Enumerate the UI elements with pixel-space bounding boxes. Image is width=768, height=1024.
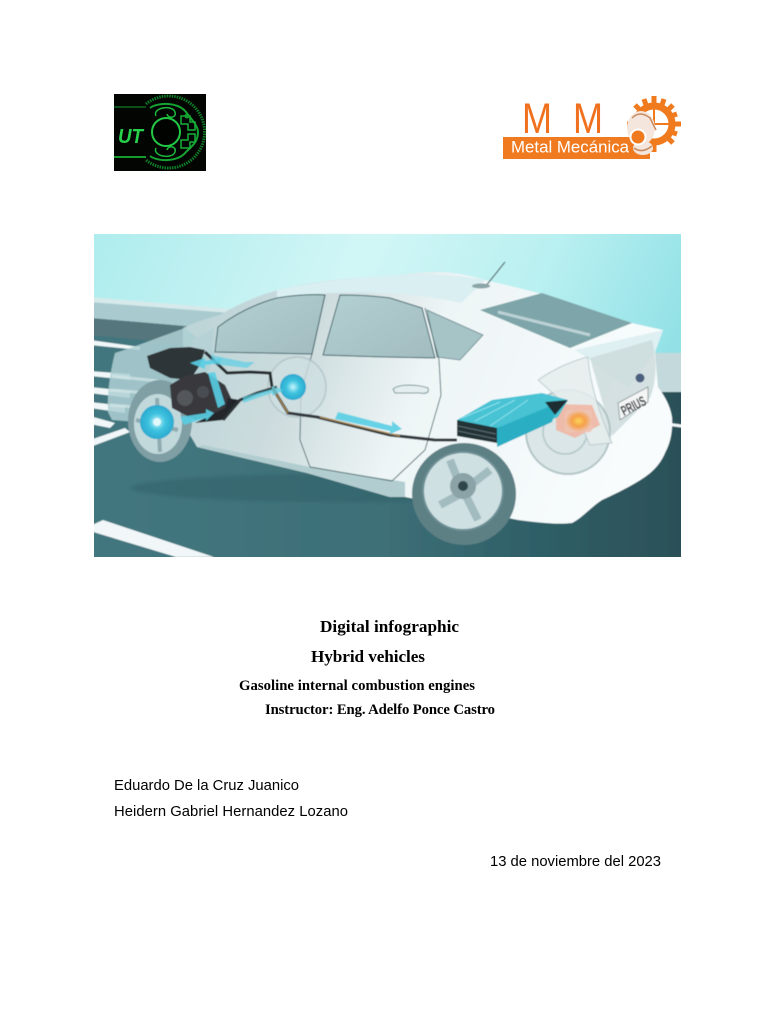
car shadow (133, 476, 390, 500)
door cut lines (299, 354, 313, 468)
authors (114, 778, 348, 820)
author two: Heidern Gabriel Hernandez Lozano (114, 804, 348, 820)
logo: UT university seal (114, 94, 206, 171)
license plate: PRIUS (618, 393, 649, 419)
page (94, 94, 681, 866)
date: 13 de noviembre del 2023 (490, 854, 661, 870)
subtitle: Hybrid vehicles: Hybrid vehicles (311, 647, 425, 666)
logo: Metal Mecánica: M (573, 95, 603, 143)
photo: Prius hybrid cutaway (90, 230, 685, 561)
barrier left (94, 302, 224, 326)
logo: Metal Mecánica: Metal Mecánica (511, 138, 630, 156)
logo: Metal Mecánica: M (522, 95, 552, 143)
logo: Metal Mecánica (503, 95, 681, 159)
logo: UT university seal: UT (118, 126, 145, 148)
road (90, 318, 685, 561)
emblem (636, 374, 644, 382)
course name: Gasoline internal combustion engines (239, 678, 475, 694)
title block (239, 617, 495, 718)
front wheel (128, 380, 192, 462)
flow arrows (180, 355, 402, 434)
license plate (618, 387, 649, 420)
title: Digital infographic: Digital infographic (320, 617, 459, 636)
barrier right (654, 352, 681, 393)
lower door sill (197, 445, 405, 497)
door handle (393, 385, 428, 393)
rear road wheel (412, 443, 516, 545)
power cable (272, 387, 457, 440)
car body (183, 272, 672, 524)
spoiler and tailgate (576, 330, 662, 360)
front translucent hood (108, 328, 215, 425)
windows (192, 293, 632, 360)
middle transparent wheel (268, 357, 326, 417)
instructor: Instructor: Eng. Adelfo Ponce Castro (265, 702, 495, 718)
roof sheen (277, 275, 485, 303)
tail lamp housing (538, 357, 612, 445)
author one: Eduardo De la Cruz Juanico (114, 778, 299, 794)
rear transparent wheel (526, 390, 610, 474)
sky (94, 234, 681, 354)
lane markings (90, 340, 685, 557)
engine block (147, 347, 277, 423)
tail lamp (556, 404, 600, 438)
antenna (485, 262, 505, 287)
seal on gear (627, 111, 656, 155)
gear (627, 96, 681, 152)
battery pack (457, 393, 568, 447)
